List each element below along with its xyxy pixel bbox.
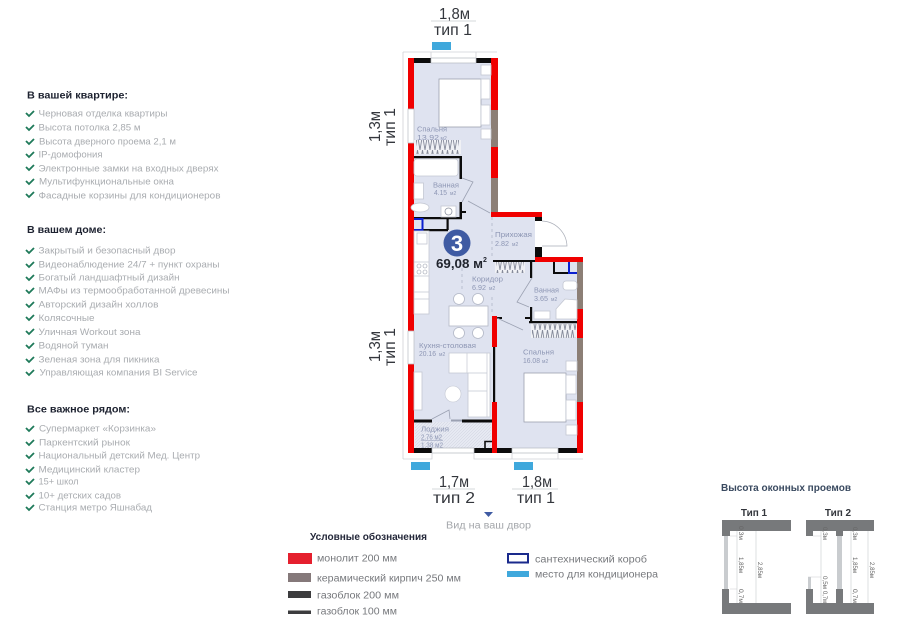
list: nearby places — [26, 424, 200, 514]
list: nearby places: Национальный детский Мед. Центр — [38, 450, 200, 462]
walls: thin partitions — [414, 156, 577, 422]
interior doors — [432, 178, 532, 419]
shaft boxes — [414, 219, 577, 273]
list: nearby places: 10+ детских садов — [38, 490, 121, 502]
legend: monolith — [288, 553, 397, 564]
dimension: top window: тип 1 — [434, 22, 472, 39]
diagram: type 2 — [806, 508, 874, 614]
diagram: type 2: 0,3м — [851, 527, 857, 540]
list: building features: Зеленая зона для пикника — [38, 354, 160, 366]
furniture: bathroom 2 — [534, 281, 577, 319]
arrow: view direction — [484, 512, 493, 517]
legend: block 100: газоблок 100 мм — [317, 606, 397, 618]
room label: hallway: м2 — [512, 242, 518, 248]
legend: monolith: монолит 200 мм — [317, 554, 397, 564]
list: building features: Уличная Workout зона — [38, 327, 141, 338]
legend — [288, 531, 658, 618]
room label: bedroom 2: 16.08 — [523, 356, 540, 365]
list: building features: Богатый ландшафтный дизайн — [38, 272, 180, 284]
furniture: dining table — [449, 294, 488, 338]
legend: block 200: газоблок 200 мм — [317, 590, 399, 602]
room label: bathroom 1: м2 — [450, 191, 456, 197]
legend: AC place: место для кондиционера — [535, 570, 658, 580]
room label: corridor: 6.92 — [472, 283, 486, 292]
dashed kitchen lines — [462, 217, 492, 315]
furniture: sofa — [414, 353, 490, 417]
room label: loggia: 2.76 м2 — [421, 432, 442, 442]
dimension: bedroom window — [512, 474, 558, 507]
furniture: bedroom 1 — [414, 65, 491, 154]
floor plan — [403, 52, 583, 459]
panel: nearby — [26, 404, 200, 514]
diagram: type 1: 0,3м — [737, 526, 743, 540]
diagram: type 1: Тип 1 — [741, 508, 768, 519]
dimension: bedroom window: тип 1 — [517, 490, 555, 507]
list: nearby places: Паркентский рынок — [39, 438, 131, 448]
list: building features: Управляющая компания BI Service — [40, 368, 198, 378]
list: nearby places: Станция метро Яшнабад — [38, 502, 152, 514]
walls: ceramic brick — [491, 110, 583, 402]
furniture: bedroom 2 — [495, 262, 577, 435]
legend: plumbing shaft — [508, 554, 647, 566]
list: building features — [26, 246, 230, 378]
hall door — [542, 221, 567, 246]
list: apartment features — [26, 108, 220, 202]
diagram: type 2: Тип 2 — [825, 508, 852, 519]
list: building features: Видеонаблюдение 24/7 + пункт охраны — [38, 260, 220, 270]
dimension: top window: 1,8м — [439, 6, 470, 23]
diagram: type 2: 1,85м — [851, 557, 857, 573]
heading: in your building: В вашем доме: — [27, 225, 106, 236]
dimension: left upper window: тип 1 — [382, 108, 399, 146]
outer frame lines — [403, 52, 583, 459]
room label: loggia: 1.38 м2 — [421, 440, 443, 450]
list: nearby places: Супермаркет «Корзинка» — [39, 424, 156, 434]
room label: bedroom 1: Спальня — [417, 124, 447, 134]
total area: 69,08 м — [436, 256, 483, 271]
list: apartment features: Мультифункциональные окна — [39, 176, 175, 188]
legend: block 100 — [288, 606, 397, 618]
room label: bathroom 1: 4.15 — [434, 188, 447, 197]
dimension: loggia window: 1,7м — [439, 474, 469, 491]
room label: kitchen: м2 — [439, 352, 445, 358]
furniture: kitchen counter — [414, 231, 429, 314]
legend: plumbing shaft: сантехнический короб — [535, 554, 647, 566]
diagram: type 1: 1,85м — [737, 557, 743, 573]
dimension: loggia window: тип 2 — [433, 490, 475, 507]
diagram: type 2: 0,7м — [821, 591, 827, 603]
room label: bedroom 1: 13.92 — [417, 133, 439, 142]
diagram: type 2: 0,3м — [821, 527, 827, 540]
list: apartment features: Черновая отделка квартиры — [38, 108, 168, 120]
dimension: loggia window — [432, 474, 475, 507]
diagram: type 1: 0,7м — [737, 589, 743, 603]
walls: aerated block — [414, 58, 577, 453]
room label: kitchen: Кухня-столовая — [419, 341, 476, 350]
list: apartment features: IP-домофония — [38, 150, 102, 160]
dimension: bedroom window: 1,8м — [522, 474, 552, 491]
dimension: left lower window — [367, 328, 399, 366]
loggia floor — [414, 422, 492, 449]
list: nearby places: Медицинский кластер — [38, 464, 140, 476]
room label: bedroom 2: Спальня — [523, 348, 554, 356]
dimension: left upper window: 1,3м — [367, 111, 384, 142]
room label: bedroom 2: м2 — [542, 359, 548, 365]
room label: corridor: м2 — [489, 286, 495, 292]
furniture: bathroom 1 — [411, 159, 458, 217]
dimension: left lower window: тип 1 — [382, 328, 399, 366]
list: apartment features: Высота дверного проема 2,1 м — [39, 136, 176, 148]
room label: hallway: Прихожая — [495, 230, 532, 239]
legend title: Условные обозначения — [310, 531, 427, 543]
list: building features: Водяной туман — [38, 340, 108, 352]
apartment number badge: 3 — [451, 231, 463, 256]
legend: ceramic brick: керамический кирпич 250 мм — [317, 574, 461, 584]
room label: bathroom 2: м2 — [551, 297, 557, 303]
room label: kitchen: 20.16 — [419, 349, 436, 358]
windows — [408, 58, 558, 453]
apartment number badge — [444, 230, 470, 256]
panel: in your apartment — [26, 90, 220, 202]
list: nearby places: 15+ школ — [38, 476, 78, 488]
room label: bathroom 2: 3.65 — [534, 294, 548, 303]
air conditioner places — [411, 42, 533, 470]
diagram: type 2: 0,7м — [851, 589, 857, 603]
dimension: top window — [431, 6, 476, 39]
room label: bathroom 2: Ванная — [534, 286, 559, 294]
diagram: type 1 — [722, 508, 791, 614]
diagram: type 1: 2,85м — [756, 562, 762, 578]
room label: bathroom 1: Ванная — [433, 180, 459, 190]
area superscript: 2 — [483, 257, 487, 264]
dimension: left upper window — [367, 108, 399, 146]
room label: bedroom 1: м2 — [440, 136, 447, 142]
list: apartment features: Высота потолка 2,85 м — [38, 122, 140, 134]
heading: window heights: Высота оконных проемов — [721, 482, 852, 494]
list: building features: Колясочные — [38, 313, 94, 324]
panel: in your building — [26, 225, 230, 378]
walls: monolith — [408, 58, 583, 453]
list: building features: Закрытый и безопасный двор — [38, 246, 176, 256]
heading: in your apartment: В вашей квартире: — [27, 90, 128, 102]
room label: loggia: Лоджия — [421, 424, 449, 434]
room label: hallway: 2.82 — [495, 239, 509, 248]
dimension: left lower window: 1,3м — [367, 331, 384, 362]
room label: loggia — [421, 424, 449, 450]
list: building features: Авторский дизайн холлов — [38, 300, 158, 310]
caption: view to yard: Вид на ваш двор — [446, 520, 531, 532]
room label: corridor: Коридор — [472, 274, 503, 284]
floor fill — [414, 62, 578, 450]
list: building features: МАФы из термообработанной древесины — [38, 286, 230, 296]
diagram: type 2: 2,85м — [868, 562, 874, 578]
legend: block 200 — [288, 590, 399, 602]
heading: nearby: Все важное рядом: — [27, 404, 130, 416]
diagram: type 2: 0,5м — [821, 576, 827, 589]
window heights section — [721, 482, 874, 614]
list: apartment features: Электронные замки на входных дверях — [38, 164, 219, 174]
list: apartment features: Фасадные корзины для кондиционеров — [38, 190, 220, 202]
